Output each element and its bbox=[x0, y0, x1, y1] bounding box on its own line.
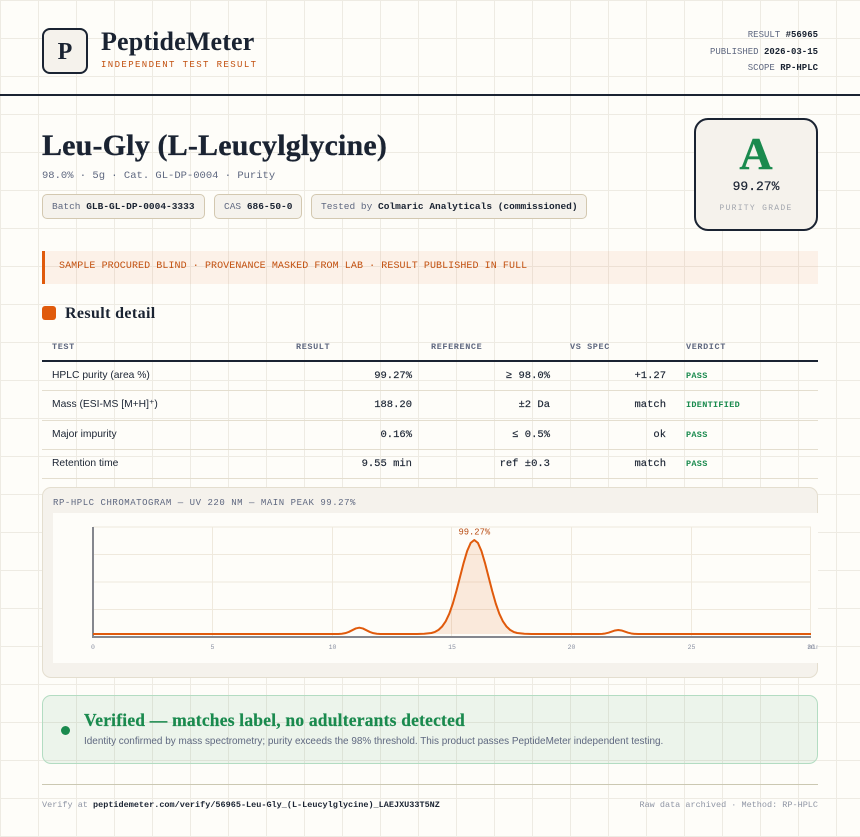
row: HPLC purity bbox=[52, 370, 708, 382]
header bbox=[0, 27, 860, 96]
verified callout bbox=[42, 695, 818, 764]
results table: REFERENCE bbox=[431, 342, 482, 352]
row: HPLC purity: HPLC purity (area %) bbox=[52, 370, 150, 381]
results table: RESULT bbox=[296, 342, 330, 352]
peak label: 99.27% bbox=[458, 528, 491, 538]
peak fill bbox=[417, 540, 532, 634]
result metadata: PUBLISHED 2026-03-15 bbox=[710, 47, 818, 57]
results table: VERDICT bbox=[686, 342, 726, 352]
row: HPLC purity: +1.27 bbox=[634, 370, 666, 382]
chromatogram panel bbox=[42, 487, 818, 678]
row: HPLC purity: ≥ 98.0% bbox=[506, 370, 550, 382]
footer note: Raw data archived · Method: RP-HPLC bbox=[639, 800, 818, 810]
tagline: INDEPENDENT TEST RESULT bbox=[101, 60, 257, 70]
x axis labels: 10 bbox=[329, 644, 336, 651]
chip: batch bbox=[42, 194, 205, 219]
chromatogram chart bbox=[53, 513, 818, 663]
chip: CAS: CAS 686-50-0 bbox=[224, 201, 292, 212]
row: mass: IDENTIFIED bbox=[686, 400, 740, 410]
x axis labels: 5 bbox=[211, 644, 215, 651]
grade letter: A bbox=[739, 128, 773, 179]
row: mass: match bbox=[634, 399, 666, 411]
result metadata: RESULT #56965 bbox=[748, 30, 818, 40]
purity value: 99.27% bbox=[733, 179, 779, 194]
callout heading: Verified — matches label, no adulterants detected bbox=[84, 710, 465, 730]
product subtitle: 98.0% · 5g · Cat. GL-DP-0004 · Purity bbox=[42, 170, 275, 182]
grade card bbox=[694, 118, 818, 231]
row: mass bbox=[52, 399, 740, 411]
brand name: PeptideMeter bbox=[101, 27, 254, 56]
row: mass: ±2 Da bbox=[518, 399, 550, 411]
x axis labels: 0 bbox=[91, 644, 95, 651]
x axis labels: 30 bbox=[807, 644, 815, 651]
footer rule bbox=[42, 784, 818, 785]
verify link: Verify at peptidemeter.com/verify/56965-Leu-Gly_(L-Leucylglycine)_LAEJXU33T5NZ bbox=[42, 800, 440, 810]
row: major impurity: Major impurity bbox=[52, 429, 117, 440]
results table bbox=[42, 342, 818, 479]
section heading: Result detail bbox=[65, 305, 156, 322]
results table: VS SPEC bbox=[570, 342, 610, 352]
row: major impurity: ok bbox=[653, 429, 666, 441]
chip: tested by: Tested by Colmaric Analyticals (commissioned) bbox=[321, 201, 578, 212]
notice text: SAMPLE PROCURED BLIND · PROVENANCE MASKED FROM LAB · RESULT PUBLISHED IN FULL bbox=[59, 261, 527, 272]
callout body: Identity confirmed by mass spectrometry; purity exceeds the 98% threshold. This product passes PeptideMeter independent testing. bbox=[84, 736, 663, 747]
row: retention time: ref ±0.3 bbox=[500, 458, 550, 470]
result metadata bbox=[710, 30, 818, 73]
row: major impurity: PASS bbox=[686, 430, 708, 440]
row: HPLC purity: 99.27% bbox=[374, 370, 412, 382]
result metadata: SCOPE RP-HPLC bbox=[748, 63, 818, 73]
logo badge: P bbox=[58, 39, 72, 65]
x axis labels: 20 bbox=[568, 644, 575, 651]
product title: Leu-Gly (L-Leucylglycine) bbox=[42, 129, 387, 162]
row: major impurity: ≤ 0.5% bbox=[512, 429, 550, 441]
section marker bbox=[42, 306, 56, 320]
row: retention time: Retention time bbox=[52, 458, 118, 469]
chip: CAS bbox=[214, 194, 302, 219]
x axis labels bbox=[91, 644, 820, 651]
row: mass: 188.20 bbox=[374, 399, 412, 411]
provenance notice bbox=[42, 251, 818, 284]
header rule bbox=[0, 94, 860, 96]
table header bbox=[42, 340, 818, 362]
axes bbox=[93, 527, 811, 637]
row: HPLC purity: PASS bbox=[686, 371, 708, 381]
row: major impurity: 0.16% bbox=[380, 429, 412, 441]
chip: tested by bbox=[311, 194, 587, 219]
grade label: PURITY GRADE bbox=[719, 204, 793, 213]
row: retention time bbox=[52, 458, 708, 470]
x axis labels: 25 bbox=[688, 644, 695, 651]
status dot bbox=[61, 726, 70, 735]
logo badge bbox=[42, 28, 88, 74]
chip: batch: Batch GLB-GL-DP-0004-3333 bbox=[52, 201, 195, 212]
chromatogram trace bbox=[93, 540, 811, 634]
row: retention time: match bbox=[634, 458, 666, 470]
row: retention time: PASS bbox=[686, 459, 708, 469]
x axis labels: 15 bbox=[448, 644, 456, 651]
row: retention time: 9.55 min bbox=[362, 458, 412, 470]
row: mass: Mass (ESI-MS [M+H]⁺) bbox=[52, 399, 158, 410]
chromatogram title: RP-HPLC CHROMATOGRAM — UV 220 NM — MAIN PEAK 99.27% bbox=[53, 498, 356, 508]
row: major impurity bbox=[52, 429, 708, 441]
results table: TEST bbox=[52, 342, 75, 352]
